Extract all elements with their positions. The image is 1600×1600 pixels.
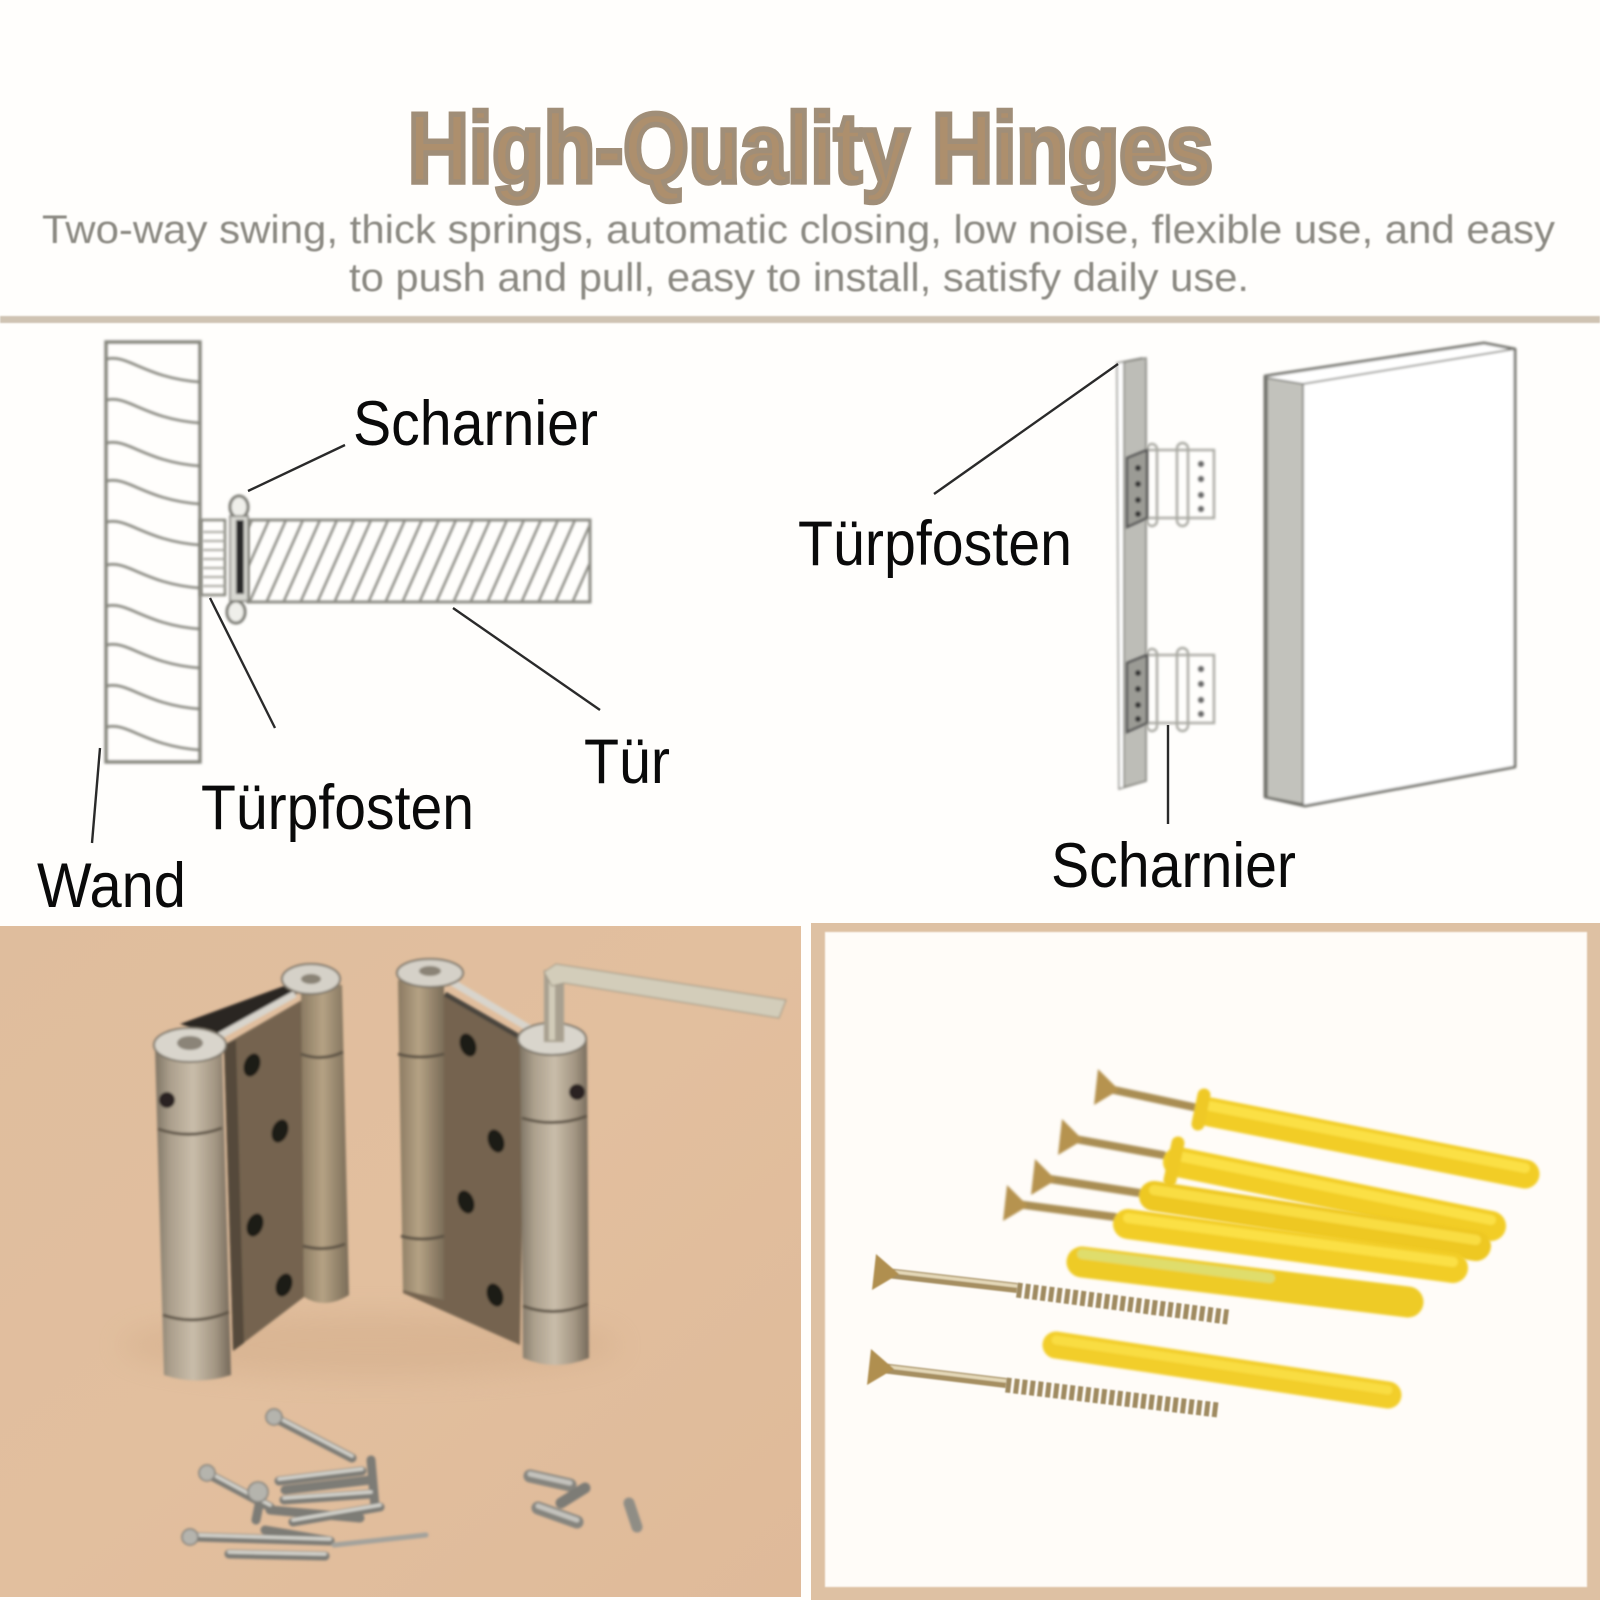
subtitle text block: to push and pull, easy to install, satisfy daily use. — [349, 256, 1249, 300]
label: Wand: Wand — [37, 851, 186, 921]
subtitle text block — [42, 208, 1555, 300]
door frame post section — [201, 520, 225, 595]
anchor set 1 — [1094, 1069, 1525, 1174]
leader line: door post — [210, 598, 275, 728]
label: Türpfosten: Türpfosten — [798, 509, 1072, 579]
cast shadow — [120, 1313, 620, 1377]
label: Türpfosten: Türpfosten — [201, 773, 474, 843]
panel: wall anchors photo — [811, 923, 1600, 1600]
anchor set 2 — [1058, 1119, 1491, 1226]
upper hinge — [1127, 443, 1214, 527]
subtitle text block: Two-way swing, thick springs, automatic closing, low noise, flexible use, and easy — [42, 208, 1555, 252]
loose anchor 5 — [1082, 1254, 1408, 1302]
leader line: hinge — [248, 445, 345, 491]
loose anchor 6 — [1056, 1340, 1388, 1395]
leader line: wall — [92, 748, 100, 843]
leader line: hinge — [1167, 725, 1169, 824]
anchor set 3 — [1031, 1159, 1476, 1246]
leader line: door post — [934, 364, 1118, 494]
left hinge — [154, 964, 349, 1380]
right hinge — [397, 959, 589, 1365]
loose screws — [182, 1409, 637, 1556]
photo backdrop — [0, 926, 801, 1597]
hinge section — [227, 496, 248, 623]
door slab — [1265, 343, 1515, 806]
wall with wood grain — [106, 342, 200, 762]
label: Scharnier: Scharnier — [353, 389, 598, 459]
screw 2 — [867, 1349, 1218, 1410]
door section with hatching — [248, 520, 590, 602]
door frame post — [1117, 358, 1146, 789]
label: Scharnier: Scharnier — [1051, 831, 1296, 901]
panel: hinge product photo — [0, 926, 801, 1597]
label: Tür: Tür — [584, 727, 670, 797]
allen key — [544, 964, 786, 1042]
anchor set 4 — [1003, 1185, 1453, 1268]
screw 1 — [872, 1254, 1228, 1317]
leader line: door — [453, 608, 600, 710]
panel: perspective installation diagram — [798, 343, 1515, 901]
photo frame — [811, 923, 1600, 1600]
panel: top-view installation diagram — [37, 342, 670, 921]
lower hinge — [1127, 648, 1214, 732]
title: High-Quality Hinges — [408, 93, 1213, 203]
